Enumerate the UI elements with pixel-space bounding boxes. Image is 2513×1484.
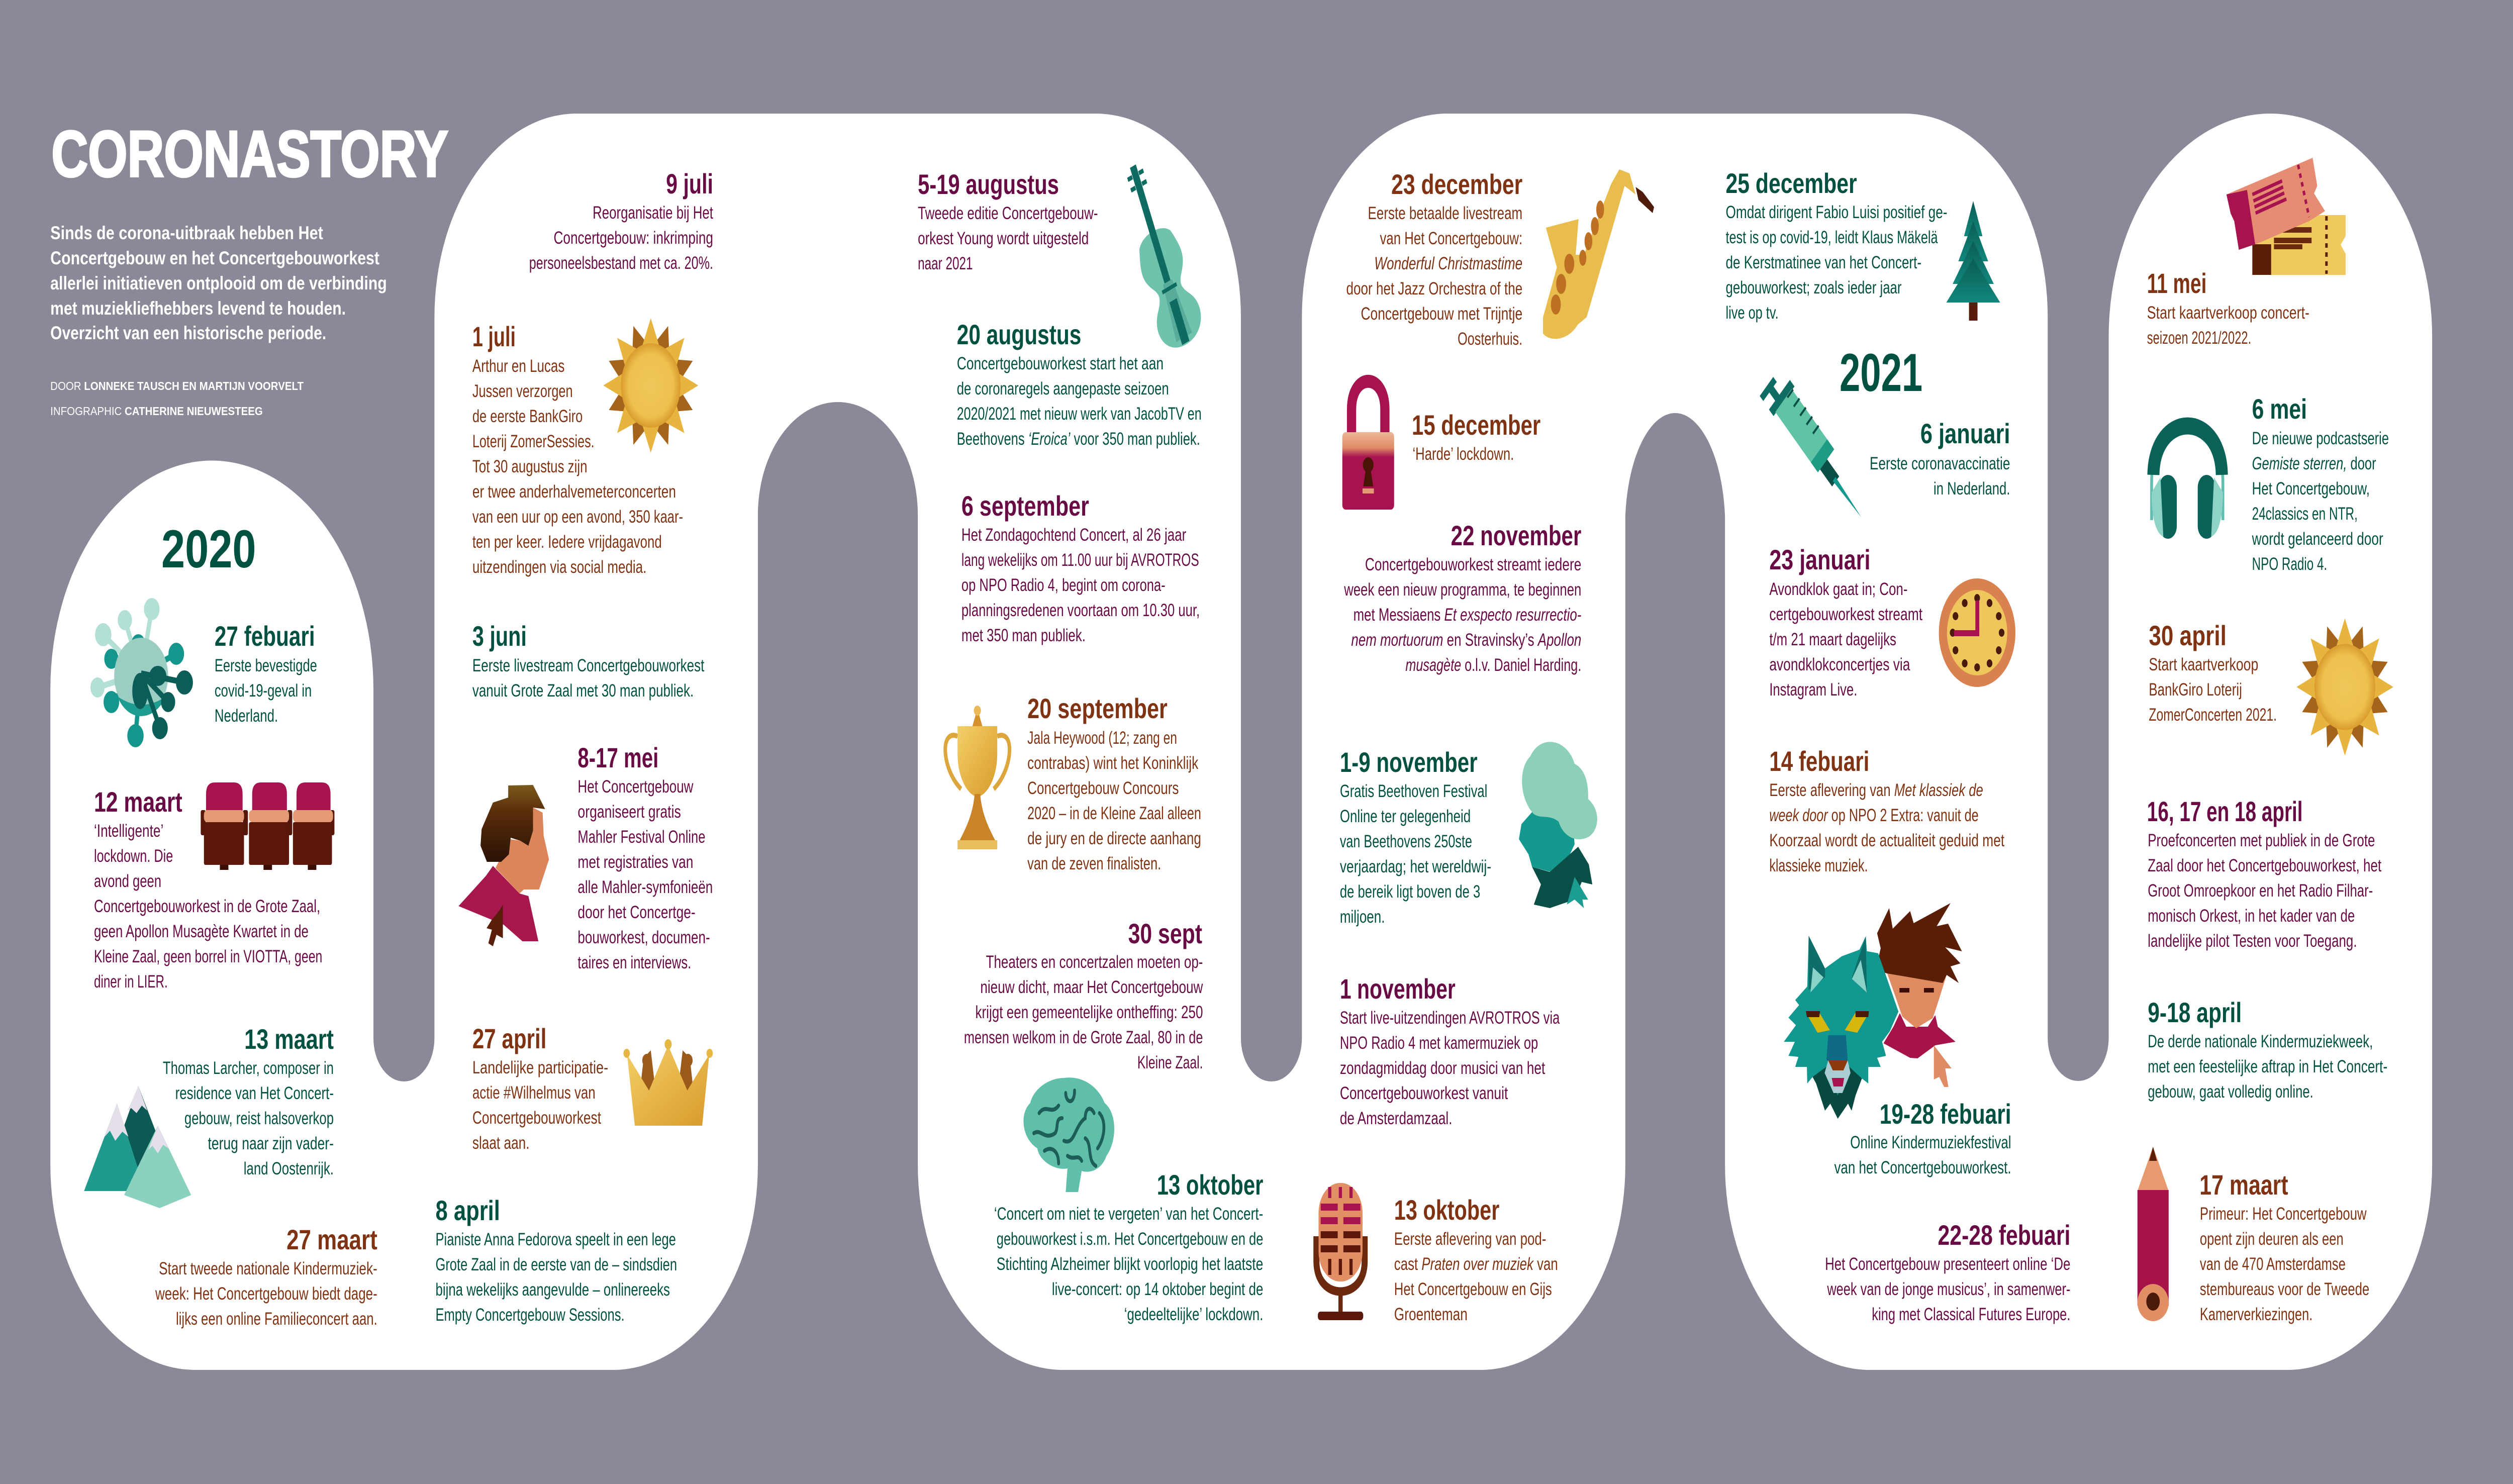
event: 20 augustus: Concertgebouworkest start het aan — [957, 354, 1164, 373]
event: 22 november: week een nieuw programma, te beginnen — [1343, 580, 1581, 600]
event: 13 oktober (podcast): Eerste aflevering van pod- — [1394, 1230, 1546, 1249]
intro text: Sinds de corona-uitbraak hebben Het — [50, 222, 323, 243]
heading: 2021: 2021 — [1840, 342, 1922, 403]
event: 25 december: gebouworkest; zoals ieder jaar — [1726, 278, 1902, 298]
event: 25 december: Omdat dirigent Fabio Luisi positief ge- — [1726, 203, 1948, 222]
event: 27 april — [472, 1023, 608, 1153]
event: 16, 17 en 18 april: monisch Orkest, in het kader van de — [2148, 907, 2355, 926]
event: 8 april: Empty Concertgebouw Sessions. — [435, 1306, 625, 1325]
icon: brain — [1023, 1077, 1114, 1192]
event: 22-28 febuari: king met Classical Futures Europe. — [1872, 1305, 2070, 1324]
event: 17 maart: Primeur: Het Concertgebouw — [2200, 1205, 2367, 1224]
event: 5-19 augustus: 5-19 augustus — [918, 169, 1059, 201]
event: 8-17 mei: taires en interviews. — [577, 953, 691, 972]
event: 6 september: 6 september — [961, 490, 1089, 522]
event: 1-9 november: miljoen. — [1340, 908, 1385, 927]
event: 16, 17 en 18 april: Proefconcerten met publiek in de Grote — [2148, 831, 2375, 850]
intro text: Concertgebouw en het Concertgebouworkest — [50, 247, 379, 268]
event: 6 januari: Eerste coronavaccinatie — [1870, 454, 2010, 473]
event: 13 oktober (podcast) — [1394, 1195, 1558, 1324]
event: 23 januari: t/m 21 maart dagelijks — [1769, 630, 1896, 649]
event: 1-9 november: Gratis Beethoven Festival — [1340, 782, 1487, 801]
event: 27 maart: week: Het Concertgebouw biedt dage- — [155, 1284, 377, 1304]
event: 3 juni — [472, 621, 705, 701]
event: 25 december: de Kerstmatinee van het Concert- — [1726, 253, 1921, 272]
event: 23 januari: 23 januari — [1769, 544, 1870, 576]
icon: Beethoven silhouette — [1519, 742, 1597, 908]
event: 14 febuari: klassieke muziek. — [1769, 856, 1868, 875]
intro text: Overzicht van een historische periode. — [50, 322, 326, 343]
event: 25 december: test is op covid-19, leidt Klaus Mäkelä — [1726, 228, 1938, 247]
event: 9 juli: Reorganisatie bij Het — [593, 204, 713, 223]
event: 23 december: Oosterhuis. — [1458, 330, 1522, 349]
event: 17 maart: Kamerverkiezingen. — [2200, 1305, 2312, 1324]
event: 9 juli: 9 juli — [666, 168, 713, 200]
event: 25 december: live op tv. — [1726, 304, 1779, 323]
event: 1 november: Start live-uitzendingen AVROTROS via — [1340, 1009, 1560, 1028]
event: 13 oktober (podcast): 13 oktober — [1394, 1195, 1499, 1226]
event: 23 december — [1346, 169, 1522, 349]
event: 1 juli: Jussen verzorgen — [472, 382, 573, 401]
icon: saxophone — [1543, 169, 1654, 339]
event: 6 mei — [2252, 393, 2389, 574]
event: 5-19 augustus: naar 2021 — [918, 254, 973, 273]
event: 1 juli: Arthur en Lucas — [472, 357, 564, 376]
event: 17 maart: stembureaus voor de Tweede — [2200, 1280, 2369, 1299]
event: 12 maart — [94, 786, 322, 992]
event: 6 mei: wordt gelanceerd door — [2252, 530, 2383, 549]
event: 9 juli — [529, 168, 713, 273]
event: 22-28 febuari: 22-28 febuari — [1938, 1220, 2070, 1251]
event: 13 oktober (concert): Stichting Alzheimer blijkt voorlopig het laatste — [997, 1255, 1263, 1274]
event: 9-18 april — [2148, 997, 2387, 1102]
event: 23 december: Eerste betaalde livestream — [1368, 204, 1522, 223]
event: 22-28 febuari — [1825, 1220, 2070, 1324]
event: 8-17 mei: 8-17 mei — [577, 742, 658, 774]
event: 13 maart: residence van Het Concert- — [175, 1084, 334, 1103]
event: 1 juli: van een uur op een avond, 350 kaar- — [472, 508, 683, 527]
event: 11 mei: seizoen 2021/2022. — [2147, 329, 2251, 348]
icon: virus — [92, 601, 191, 744]
event: 16, 17 en 18 april: landelijke pilot Testen voor Toegang. — [2148, 932, 2357, 951]
event: 13 oktober (concert) — [994, 1169, 1264, 1324]
event: 30 april: Start kaartverkoop — [2149, 655, 2258, 674]
event: 14 febuari: Koorzaal wordt de actualiteit geduid met — [1769, 831, 2005, 850]
event: 1-9 november: Online ter gelegenheid — [1340, 807, 1471, 826]
event: 8-17 mei: bouworkest, documen- — [577, 928, 710, 947]
event: 9-18 april: De derde nationale Kindermuziekweek, — [2148, 1032, 2373, 1051]
intro text — [50, 222, 387, 343]
event: 13 maart: 13 maart — [244, 1024, 334, 1055]
event: 20 september: van de zeven finalisten. — [1027, 854, 1161, 873]
event: 3 juni: vanuit Grote Zaal met 30 man publiek. — [472, 681, 694, 701]
icon: mountains — [84, 1086, 191, 1208]
icon: trophy — [945, 706, 1010, 849]
event: 27 april: slaat aan. — [472, 1134, 529, 1153]
event: 22-28 febuari: week van de jonge musicus’, in samenwer- — [1826, 1280, 2070, 1299]
event: 17 maart: opent zijn deuren als een — [2200, 1230, 2344, 1249]
event: 30 sept — [964, 918, 1203, 1072]
event: 1 juli: Loterij ZomerSessies. — [472, 432, 595, 451]
event: 8-17 mei: door het Concertge- — [577, 903, 696, 922]
event: 12 maart: geen Apollon Musagète Kwartet in de — [94, 922, 309, 941]
event: 23 december: Wonderful Christmastime — [1374, 254, 1522, 273]
credits: DOOR LONNEKE TAUSCH EN MARTIJN VOORVELT — [50, 380, 304, 393]
event: 8-17 mei: organiseert gratis — [577, 803, 681, 822]
event: 5-19 augustus: orkest Young wordt uitgesteld — [918, 229, 1089, 248]
event: 6 september: op NPO Radio 4, begint om corona- — [961, 576, 1166, 595]
event: 13 oktober (concert): 13 oktober — [1157, 1169, 1264, 1201]
event: 1 november: zondagmiddag door musici van het — [1340, 1059, 1545, 1078]
event: 30 sept: nieuw dicht, maar Het Concertgebouw — [980, 978, 1203, 997]
event: 23 januari: certgebouworkest streamt — [1769, 605, 1923, 624]
icon: clock — [1939, 578, 2015, 687]
event: 27 febuari — [215, 621, 317, 726]
event: 15 december — [1412, 410, 1540, 464]
event: 3 juni: 3 juni — [472, 621, 527, 652]
event: 13 maart — [163, 1024, 334, 1178]
icon: sun — [603, 318, 698, 453]
event: 23 december: Concertgebouw met Trijntje — [1361, 305, 1522, 324]
icon: padlock — [1342, 381, 1394, 510]
event: 20 augustus: 20 augustus — [957, 319, 1081, 351]
event: 30 sept: Theaters en concertzalen moeten op- — [986, 953, 1203, 972]
event: 23 december: door het Jazz Orchestra of the — [1346, 279, 1522, 299]
event: 22 november: musagète o.l.v. Daniel Harding. — [1405, 656, 1581, 675]
event: 6 mei: De nieuwe podcastserie — [2252, 429, 2389, 448]
event: 8-17 mei: Mahler Festival Online — [577, 828, 705, 847]
event: 22 november: 22 november — [1451, 520, 1581, 552]
event: 1-9 november: verjaardag; het wereldwij- — [1340, 857, 1491, 876]
icon: pencil — [2138, 1147, 2169, 1321]
intro text: met muziekliefhebbers levend te houden. — [50, 298, 346, 319]
event: 9-18 april: 9-18 april — [2148, 997, 2242, 1029]
event: 6 september — [961, 490, 1200, 645]
event: 11 mei — [2147, 268, 2309, 348]
icon: violin — [1112, 154, 1207, 357]
event: 12 maart: 12 maart — [94, 786, 182, 818]
event: 19-28 febuari: Online Kindermuziekfestival — [1850, 1133, 2011, 1152]
event: 1 november: Concertgebouworkest vanuit — [1340, 1084, 1508, 1103]
icon: syringe — [1760, 377, 1861, 517]
event: 14 febuari: Eerste aflevering van Met klassiek de — [1769, 781, 1983, 800]
event: 23 januari: Avondklok gaat in; Con- — [1769, 580, 1908, 599]
credits: INFOGRAPHIC CATHERINE NIEUWESTEEG — [50, 405, 263, 418]
icon: concert hall seats — [201, 782, 334, 870]
event: 30 sept: mensen welkom in de Grote Zaal, 80 in de — [964, 1028, 1203, 1047]
event: 8-17 mei: met registraties van — [577, 853, 693, 872]
event: 16, 17 en 18 april: Zaal door het Concertgebouworkest, het — [2148, 856, 2382, 875]
event: 20 september: contrabas) wint het Koninklijk — [1027, 754, 1199, 773]
event: 5-19 augustus — [918, 169, 1098, 273]
event: 1 juli: de eerste BankGiro — [472, 407, 583, 426]
event: 20 september: de jury en de directe aanhang — [1027, 829, 1201, 848]
event: 30 sept: 30 sept — [1128, 918, 1202, 950]
event: 27 febuari: Eerste bevestigde — [215, 656, 317, 675]
event: 25 december: 25 december — [1726, 168, 1857, 200]
event: 27 april: actie #Wilhelmus van — [472, 1083, 596, 1103]
intro text: allerlei initiatieven ontplooid om de verbinding — [50, 272, 387, 293]
event: 20 september: 20 september — [1027, 693, 1168, 725]
icon: crown — [623, 1039, 713, 1126]
event: 6 mei: 6 mei — [2252, 393, 2307, 425]
event: 20 september: 2020 – in de Kleine Zaal alleen — [1027, 804, 1201, 823]
event: 12 maart: Concertgebouworkest in de Grote Zaal, — [94, 897, 320, 916]
event: 12 maart: Kleine Zaal, geen borrel in VIOTTA, geen — [94, 947, 322, 966]
event: 20 september: Concertgebouw Concours — [1027, 779, 1179, 798]
event: 1 november: de Amsterdamzaal. — [1340, 1109, 1453, 1128]
event: 8-17 mei — [577, 742, 713, 972]
event: 1 juli: er twee anderhalvemeterconcerten — [472, 482, 676, 502]
event: 27 april: 27 april — [472, 1023, 546, 1055]
event: 11 mei: 11 mei — [2147, 268, 2206, 300]
event: 1 november: 1 november — [1340, 973, 1456, 1005]
event: 12 maart: diner in LIER. — [94, 972, 168, 992]
event: 6 september: planningsredenen voortaan om 10.30 uur, — [961, 601, 1200, 620]
event: 1 juli — [472, 321, 683, 577]
event: 16, 17 en 18 april: 16, 17 en 18 april — [2147, 796, 2303, 828]
event: 16, 17 en 18 april — [2147, 796, 2382, 951]
event: 8 april — [435, 1195, 677, 1325]
event: 1 juli: uitzendingen via social media. — [472, 558, 646, 577]
event: 1-9 november — [1340, 747, 1491, 927]
event: 25 december — [1726, 168, 1948, 323]
event: 19-28 febuari: van het Concertgebouworkest. — [1834, 1158, 2011, 1177]
event: 23 januari — [1769, 544, 1923, 700]
event: 1-9 november: de bereik ligt boven de 3 — [1340, 882, 1480, 902]
event: 20 september: Jala Heywood (12; zang en — [1027, 729, 1177, 748]
event: 20 augustus: de coronaregels aangepaste seizoen — [957, 379, 1169, 399]
event: 13 oktober (podcast): Groenteman — [1394, 1305, 1468, 1324]
event: 1 november: NPO Radio 4 met kamermuziek op — [1340, 1034, 1538, 1053]
event: 15 december: ‘Harde’ lockdown. — [1412, 445, 1514, 464]
event: 27 april: Landelijke participatie- — [472, 1058, 608, 1077]
event: 13 maart: land Oostenrijk. — [244, 1159, 334, 1178]
event: 9 juli: personeelsbestand met ca. 20%. — [529, 254, 713, 273]
event: 6 september: Het Zondagochtend Concert, al 26 jaar — [961, 526, 1186, 545]
event: 13 maart: gebouw, reist halsoverkop — [184, 1109, 334, 1128]
event: 27 febuari: covid-19-geval in — [215, 681, 312, 701]
event: 6 mei: Gemiste sterren, door — [2252, 454, 2376, 473]
event: 23 januari: Instagram Live. — [1769, 680, 1857, 700]
event: 23 december: 23 december — [1391, 169, 1522, 201]
event: 6 mei: NPO Radio 4. — [2252, 555, 2327, 574]
event: 9-18 april: met een feestelijke aftrap in Het Concert- — [2148, 1057, 2387, 1076]
event: 1 juli: Tot 30 augustus zijn — [472, 457, 588, 476]
event: 9-18 april: gebouw, gaat volledig online. — [2148, 1082, 2313, 1102]
event: 6 januari: 6 januari — [1920, 418, 2010, 450]
event: 30 april: 30 april — [2149, 620, 2227, 652]
event: 6 mei: 24classics en NTR, — [2252, 505, 2358, 524]
event: 14 febuari: 14 febuari — [1769, 746, 1869, 777]
icon: wolf and boy — [1784, 903, 1962, 1119]
event: 1 juli: ten per keer. Iedere vrijdagavond — [472, 533, 662, 552]
event: 1-9 november: 1-9 november — [1340, 747, 1478, 778]
event: 22-28 febuari: Het Concertgebouw presenteert online ‘De — [1825, 1255, 2070, 1274]
event: 27 febuari: 27 febuari — [215, 621, 315, 652]
icon: tickets — [2227, 158, 2346, 275]
title: CORONASTORY — [51, 117, 448, 190]
event: 22 november: met Messiaens Et exspecto resurrectio- — [1354, 606, 1581, 625]
event: 6 september: lang wekelijks om 11.00 uur bij AVROTROS — [961, 551, 1199, 570]
credits — [50, 380, 304, 418]
event: 14 febuari — [1769, 746, 2005, 875]
event: 30 sept: krijgt een gemeentelijke ontheffing: 250 — [975, 1003, 1203, 1022]
event: 20 augustus: Beethovens ‘Eroica’ voor 350 man publiek. — [957, 430, 1200, 449]
event: 1-9 november: van Beethovens 250ste — [1340, 832, 1472, 851]
event: 23 januari: avondklokconcertjes via — [1769, 655, 1910, 674]
event: 8 april: 8 april — [435, 1195, 500, 1227]
event: 6 januari: in Nederland. — [1934, 479, 2010, 499]
event: 27 maart — [155, 1224, 377, 1329]
event: 22 november — [1343, 520, 1581, 675]
event: 30 april: ZomerConcerten 2021. — [2149, 706, 2277, 725]
event: 22 november: Concertgebouworkest streamt iedere — [1365, 555, 1581, 574]
event: 13 maart: terug naar zijn vader- — [208, 1134, 334, 1153]
event: 1 november — [1340, 973, 1560, 1128]
event: 13 oktober (podcast): Het Concertgebouw en Gijs — [1394, 1280, 1552, 1299]
event: 16, 17 en 18 april: Groot Omroepkoor en het Radio Filhar- — [2148, 881, 2373, 901]
event: 23 december: van Het Concertgebouw: — [1380, 229, 1522, 248]
event: 17 maart: van de 470 Amsterdamse — [2200, 1255, 2346, 1274]
event: 13 oktober (concert): ‘gedeeltelijke’ lockdown. — [1124, 1305, 1263, 1324]
event: 8-17 mei: Het Concertgebouw — [577, 777, 694, 797]
event: 13 oktober (concert): live-concert: op 14 oktober begint de — [1052, 1280, 1263, 1299]
event: 20 augustus — [957, 319, 1202, 449]
event: 19-28 febuari: 19-28 febuari — [1880, 1099, 2011, 1130]
event: 27 febuari: Nederland. — [215, 707, 278, 726]
icon: headphones — [2152, 426, 2223, 539]
event: 27 maart: 27 maart — [286, 1224, 377, 1256]
event: 27 maart: lijks een online Familieconcert aan. — [176, 1310, 377, 1329]
event: 8 april: Grote Zaal in de eerste van de – sindsdien — [435, 1255, 677, 1274]
event: 17 maart: 17 maart — [2199, 1169, 2288, 1201]
event: 12 maart: lockdown. Die — [94, 847, 173, 866]
event: 30 sept: Kleine Zaal. — [1137, 1053, 1203, 1072]
event: 12 maart: avond geen — [94, 872, 161, 891]
event: 5-19 augustus: Tweede editie Concertgebouw- — [918, 204, 1098, 223]
event: 8 april: Pianiste Anna Fedorova speelt in een lege — [435, 1230, 676, 1249]
event: 6 september: met 350 man publiek. — [961, 626, 1086, 645]
event: 9 juli: Concertgebouw: inkrimping — [553, 229, 713, 248]
event: 13 oktober (podcast): cast Praten over muziek van — [1394, 1255, 1558, 1274]
icon: portrait of Mahler — [458, 785, 549, 946]
event: 22 november: nem mortuorum en Stravinsky’s Apollon — [1351, 631, 1581, 650]
event: 3 juni: Eerste livestream Concertgebouworkest — [472, 656, 705, 675]
icon: sun — [2296, 618, 2393, 756]
event: 20 september — [1027, 693, 1201, 873]
icon: christmas tree — [1946, 201, 2000, 321]
event: 27 maart: Start tweede nationale Kindermuziek- — [159, 1259, 377, 1278]
event: 13 maart: Thomas Larcher, composer in — [163, 1059, 334, 1078]
event: 17 maart — [2199, 1169, 2369, 1324]
event: 12 maart: ‘Intelligente’ — [94, 822, 163, 841]
event: 8 april: bijna wekelijks aangevulde – onlinereeks — [435, 1280, 670, 1300]
heading: 2020: 2020 — [161, 519, 256, 579]
event: 11 mei: Start kaartverkoop concert- — [2147, 304, 2309, 323]
event: 15 december: 15 december — [1412, 410, 1540, 441]
event: 20 augustus: 2020/2021 met nieuw werk van JacobTV en — [957, 405, 1202, 424]
icon: microphone — [1316, 1183, 1365, 1320]
event: 19-28 febuari — [1834, 1099, 2011, 1177]
event: 30 april — [2149, 620, 2277, 725]
event: 30 april: BankGiro Loterij — [2149, 680, 2242, 700]
event: 6 mei: Het Concertgebouw, — [2252, 479, 2370, 499]
event: 8-17 mei: alle Mahler-symfonieën — [577, 878, 713, 897]
event: 13 oktober (concert): ‘Concert om niet te vergeten’ van het Concert- — [994, 1205, 1263, 1224]
event: 6 januari — [1870, 418, 2010, 499]
event: 1 juli: 1 juli — [472, 321, 516, 353]
event: 14 febuari: week door op NPO 2 Extra: vanuit de — [1769, 806, 1979, 825]
event: 13 oktober (concert): gebouworkest i.s.m. Het Concertgebouw en de — [997, 1230, 1263, 1249]
event: 27 april: Concertgebouworkest — [472, 1109, 602, 1128]
